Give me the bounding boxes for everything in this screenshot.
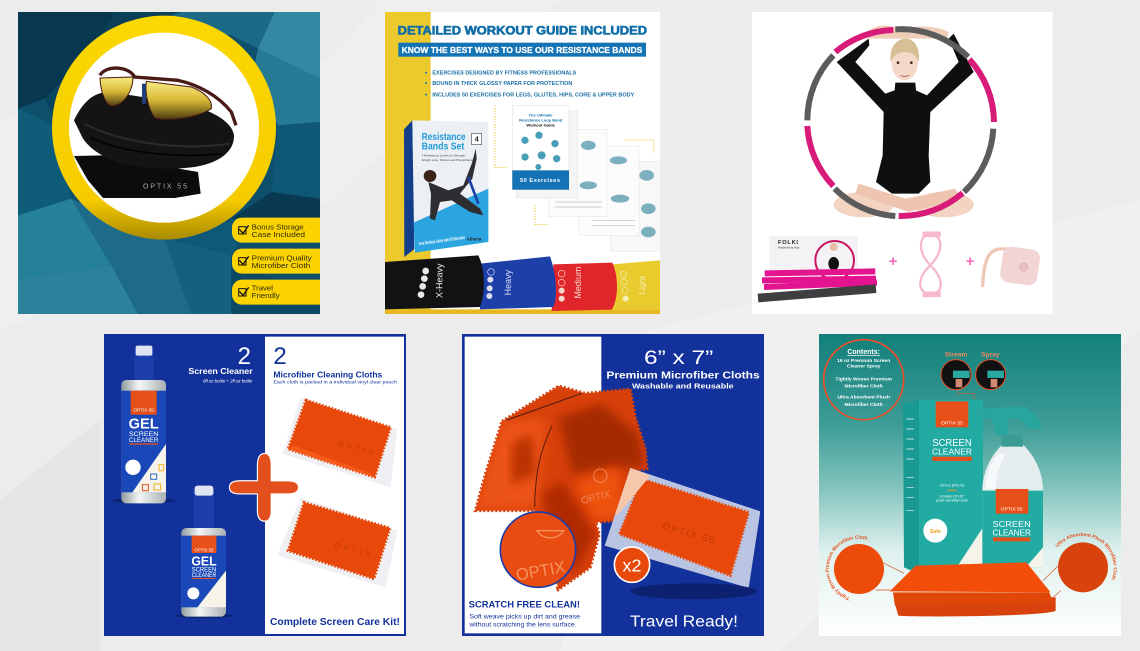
panel: sunglasses bbox=[18, 12, 320, 314]
manual card: FOLKI bbox=[778, 240, 798, 246]
cloth pouch top: OPTIX bbox=[337, 439, 375, 457]
scratch free text bbox=[468, 613, 581, 628]
cloth count bbox=[273, 343, 398, 385]
heading: DETAILED WORKOUT GUIDE INCLUDED bbox=[398, 25, 647, 38]
guide pages bbox=[512, 106, 667, 251]
zoom circle: OPTIX bbox=[514, 557, 567, 585]
folded hoop pieces bbox=[758, 271, 877, 298]
spray bottle: CLEANER bbox=[992, 527, 1031, 537]
product box: Includes 16"x16" bbox=[940, 494, 965, 498]
draped cloth: OPTIX bbox=[580, 489, 612, 507]
product box: CLEANER bbox=[932, 447, 972, 457]
plus sign bbox=[230, 454, 298, 521]
bullet list: BOUND IN THICK GLOSSY PAPER FOR PROTECTION bbox=[432, 81, 573, 87]
cleaner count: 8fl oz bottle + 2fl oz bottle bbox=[203, 378, 253, 383]
cloth pouch bottom: OPTIX bbox=[333, 541, 371, 559]
product box: plush microfiber cloth bbox=[936, 499, 968, 503]
bullet list: EXERCISES DESIGNED BY FITNESS PROFESSIONALS bbox=[432, 71, 577, 77]
right swatch bbox=[1042, 532, 1118, 598]
contents circle: Cleaner Spray bbox=[847, 364, 881, 370]
cleaner count: Screen Cleaner bbox=[188, 367, 253, 376]
cleaner count bbox=[188, 343, 253, 383]
left swatch bbox=[826, 535, 904, 600]
guide pages: 50 Exercises bbox=[520, 178, 560, 184]
large bottle: OPTIX 55 bbox=[133, 407, 154, 412]
small bottle: GEL bbox=[191, 555, 217, 569]
product box: Safe bbox=[930, 529, 941, 535]
stream and spray: Spray bbox=[981, 352, 1000, 359]
shadow bbox=[630, 583, 757, 599]
white half bbox=[465, 337, 601, 633]
small bottle: SCREEN bbox=[192, 568, 216, 574]
large bottle: GEL bbox=[129, 417, 159, 433]
dotted accents bbox=[495, 105, 654, 225]
banner: KNOW THE BEST WAYS TO USE OUR RESISTANCE BANDS bbox=[402, 45, 643, 55]
white half bbox=[265, 337, 404, 634]
product box: Free Workout Guide with 50 Exercises bbox=[418, 235, 466, 246]
pouch bbox=[605, 468, 760, 588]
manual card: Weighted Hula Hoop bbox=[778, 247, 800, 250]
band: light: Light bbox=[637, 275, 647, 295]
cloth bbox=[74, 155, 201, 198]
folded cloths bbox=[890, 562, 1056, 616]
pouch: OPTIX 55 bbox=[661, 521, 715, 546]
plus sign: + bbox=[889, 254, 897, 270]
panel: workout guide bbox=[385, 12, 660, 314]
band: medium bbox=[552, 263, 617, 311]
subheading two: Washable and Reusable bbox=[632, 384, 734, 391]
product box: 4 bbox=[475, 134, 480, 143]
white disc bbox=[69, 33, 259, 223]
cloth logo: OPTIX 55 bbox=[143, 183, 187, 190]
hoop bbox=[807, 29, 994, 216]
panel: gel screen cleaner kit bbox=[104, 334, 406, 636]
product box bbox=[404, 120, 488, 257]
product box: Athena bbox=[467, 236, 482, 241]
guide pages: The Ultimate bbox=[529, 113, 553, 118]
contents circle: Ultra Absorbent Plush bbox=[837, 395, 890, 401]
cloth count: Each cloth is packed in a individual vinyl clear pouch bbox=[273, 380, 398, 385]
callout: travel friendly bbox=[232, 280, 332, 305]
callout: microfiber cloth bbox=[232, 249, 332, 274]
stream and spray bbox=[941, 352, 1006, 412]
callout: storage case: Bonus Storage bbox=[252, 222, 304, 231]
spray bottle bbox=[976, 407, 1043, 567]
sunglasses bbox=[100, 68, 236, 125]
band: medium: Medium bbox=[573, 267, 583, 299]
product box bbox=[903, 400, 983, 574]
contents circle: Microfiber Cloth bbox=[845, 402, 883, 408]
yellow strip bbox=[385, 12, 431, 314]
small bottle: CLEANER bbox=[192, 573, 217, 579]
case bbox=[74, 92, 234, 169]
cloth pouch top bbox=[282, 397, 397, 487]
spray bottle: OPTIX 55 bbox=[1001, 507, 1023, 513]
right swatch: Ultra Absorbent Plush Microfiber Cloth bbox=[1055, 532, 1118, 580]
contents circle: 16 oz Premium Screen bbox=[837, 358, 890, 364]
callout: storage case: Case Included bbox=[252, 230, 305, 239]
plus sign: + bbox=[966, 254, 974, 270]
spray bottle: SCREEN bbox=[992, 519, 1031, 529]
cloth count: 2 bbox=[273, 343, 287, 370]
cloth pouch bottom bbox=[277, 497, 397, 587]
panel: screen cleaner spray bbox=[819, 334, 1121, 636]
product box: Weight Loss, Fitness and Physiotherapy bbox=[422, 158, 476, 162]
draped cloth bbox=[475, 386, 647, 591]
product box: 4 Resistance Levels for Strength bbox=[422, 154, 465, 158]
band: heavy bbox=[480, 256, 556, 309]
small bottle bbox=[176, 486, 232, 618]
contents circle: Contents: bbox=[847, 349, 880, 356]
contents circle bbox=[824, 340, 904, 420]
cloth count: Microfiber Cleaning Cloths bbox=[273, 370, 383, 379]
figure-eight band bbox=[920, 233, 941, 296]
polygon background bbox=[18, 12, 320, 314]
callout: travel friendly: Travel bbox=[252, 283, 273, 292]
scratch free heading: SCRATCH FREE CLEAN! bbox=[469, 599, 580, 609]
panel: weighted hoop bbox=[752, 12, 1053, 314]
x2 badge: x2 bbox=[622, 556, 641, 576]
x2 badge bbox=[614, 547, 650, 582]
stream and spray: Stream bbox=[945, 352, 967, 359]
bullet list: INCLUDES 50 EXERCISES FOR LEGS, GLUTES, HIPS, CORE & UPPER BODY bbox=[432, 93, 635, 99]
scratch free text: Soft weave picks up dirt and grease bbox=[469, 613, 581, 620]
product box: OPTIX 55 bbox=[941, 421, 963, 427]
callout: microfiber cloth: Premium Quality bbox=[252, 253, 312, 262]
large bottle: CLEANER bbox=[129, 437, 159, 444]
travel ready: Travel Ready! bbox=[630, 614, 738, 631]
small bottle: OPTIX 55 bbox=[194, 547, 214, 552]
zoom circle bbox=[500, 512, 576, 587]
band: light bbox=[612, 260, 660, 309]
yellow ring bbox=[52, 16, 276, 240]
manual card bbox=[769, 236, 858, 280]
panel: microfiber cloths bbox=[462, 334, 764, 636]
guide pages: Resistance Loop Band bbox=[519, 118, 563, 123]
tagline: Complete Screen Care Kit! bbox=[270, 617, 400, 628]
callout: travel friendly: Friendly bbox=[252, 291, 280, 300]
contents circle: Tightly Woven Premium bbox=[835, 376, 893, 382]
left swatch: Tightly Woven Premium Microfiber Cloth bbox=[826, 535, 868, 600]
bottom strip bbox=[385, 309, 660, 314]
product box: Bands Set bbox=[422, 141, 465, 152]
callout: storage case bbox=[232, 218, 332, 243]
guide pages: Workout Guide bbox=[526, 123, 556, 128]
bullet list bbox=[425, 71, 635, 99]
size heading: 6” x 7” bbox=[644, 348, 713, 369]
product box: 16 fl oz (473 ml) bbox=[940, 483, 964, 487]
band: x-heavy bbox=[385, 255, 484, 309]
scratch free text: without scratching the lens surface. bbox=[468, 621, 577, 628]
large bottle: SCREEN bbox=[129, 431, 159, 438]
cleaner count: 2 bbox=[238, 343, 251, 370]
band: heavy: Heavy bbox=[503, 269, 513, 295]
large bottle bbox=[112, 346, 175, 503]
product box: Resistance bbox=[422, 132, 466, 143]
subheading: Premium Microfiber Cloths bbox=[606, 371, 760, 382]
person bbox=[834, 26, 974, 217]
product box: SCREEN bbox=[932, 438, 972, 449]
callout: microfiber cloth: Microfiber Cloth bbox=[252, 261, 310, 270]
band: x-heavy: X-Heavy bbox=[434, 263, 444, 298]
step counter bbox=[983, 246, 1041, 287]
contents circle: Microfiber Cloth bbox=[845, 383, 883, 389]
